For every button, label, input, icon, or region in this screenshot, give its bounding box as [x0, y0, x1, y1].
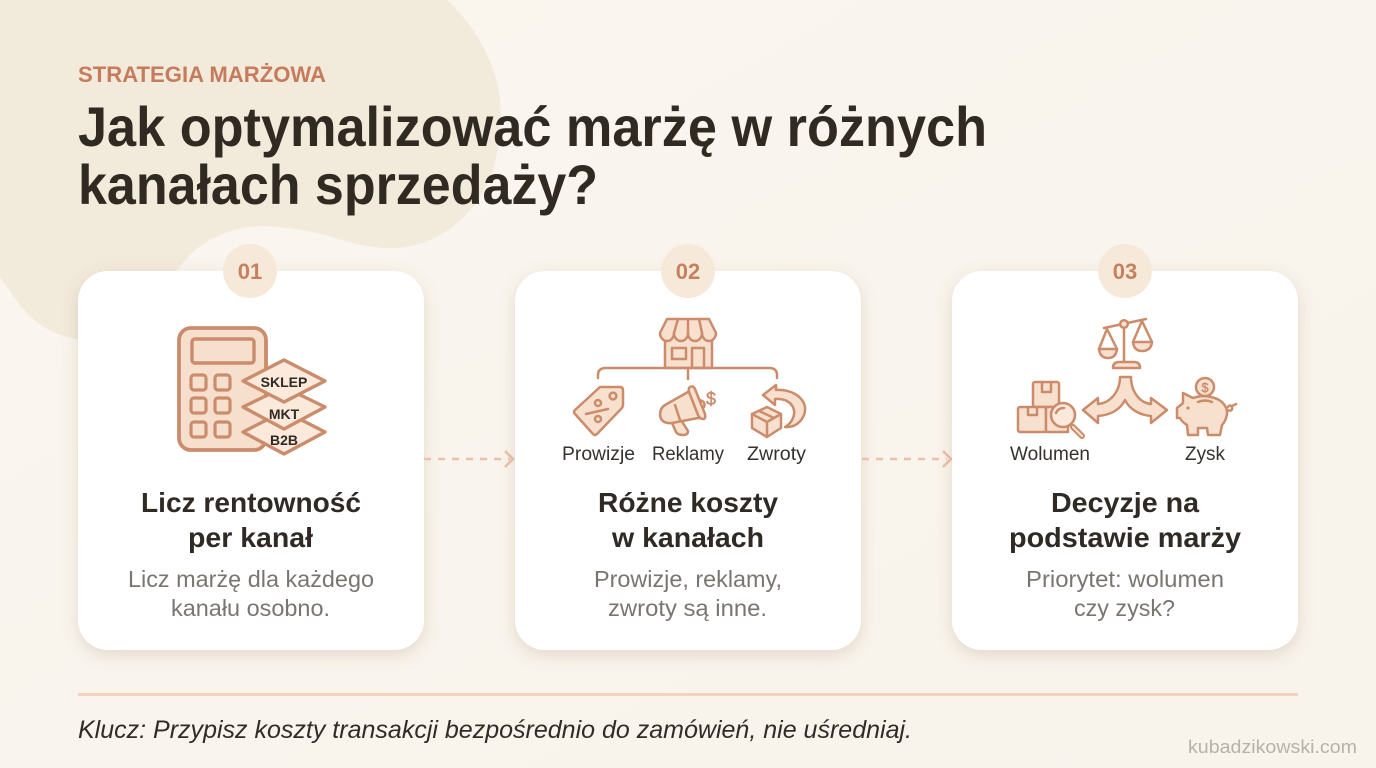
labels — [1010, 444, 1225, 465]
card 02 heading: w kanałach — [611, 522, 764, 553]
card 01 heading — [141, 487, 361, 553]
card 03 text: czy zysk? — [1074, 595, 1175, 621]
labels — [562, 444, 807, 465]
card 03 heading: podstawie marży — [1009, 522, 1241, 553]
card 03 heading — [1009, 487, 1241, 553]
card 02 heading: Różne koszty — [598, 487, 778, 518]
icon: calculator with channel layers: MKT — [269, 406, 300, 422]
card 02 text — [594, 566, 782, 621]
panel: card 01 — [78, 244, 424, 650]
card 01 heading: per kanał — [188, 522, 313, 553]
icon: calculator with channel layers: SKLEP — [261, 374, 307, 390]
footer key message: Klucz: Przypisz koszty transakcji bezpośrednio do zamówień, nie uśredniaj. — [78, 716, 912, 744]
badge 01: 01 — [238, 259, 262, 284]
labels: Reklamy — [652, 444, 724, 465]
panel: card 02 — [515, 244, 861, 650]
card 01 text: kanału osobno. — [171, 595, 330, 621]
panel: card 03 — [952, 244, 1298, 650]
icon: price tag — [574, 387, 623, 435]
icon: decision scale, boxes and piggy bank — [1010, 319, 1236, 465]
icon: split arrow — [1083, 377, 1167, 423]
title: Jak optymalizować marżę w różnych — [78, 95, 987, 158]
labels: Zwroty — [747, 444, 807, 465]
badge 03 — [1098, 244, 1152, 298]
watermark: kubadzikowski.com — [1188, 737, 1357, 757]
icon: piggy bank — [1177, 378, 1236, 435]
arrow: card 02 to 03 — [862, 451, 951, 467]
dollar sign: $ — [1201, 380, 1209, 395]
badge 03: 03 — [1113, 259, 1137, 284]
icon: store branching into costs — [562, 319, 807, 465]
badge 01 — [223, 244, 277, 298]
icon: calculator with channel layers — [179, 328, 325, 454]
labels: Zysk — [1185, 444, 1225, 465]
card 02 text: Prowizje, reklamy, — [594, 566, 782, 592]
badge 02: 02 — [676, 259, 700, 284]
card 03 text — [1026, 566, 1224, 621]
background blob — [0, 0, 501, 340]
card 02 heading — [598, 487, 778, 553]
arrow: card 01 to 02 — [424, 451, 513, 467]
card 02 text: zwroty są inne. — [608, 595, 767, 621]
icon: megaphone — [660, 386, 716, 435]
icon: returned parcel — [752, 385, 805, 437]
labels: Prowizje — [562, 444, 635, 465]
card 01 text: Licz marżę dla każdego — [128, 566, 374, 592]
dollar sign: $ — [706, 389, 716, 409]
title — [78, 95, 987, 216]
icon: store — [660, 319, 716, 368]
card 01 text — [128, 566, 374, 621]
badge 02 — [661, 244, 715, 298]
labels: Wolumen — [1010, 444, 1090, 465]
icon: calculator with channel layers: B2B — [270, 432, 298, 448]
title: kanałach sprzedaży? — [78, 153, 598, 216]
card 03 text: Priorytet: wolumen — [1026, 566, 1224, 592]
icon: scales — [1099, 319, 1152, 368]
icon: boxes with magnifier — [1018, 382, 1082, 436]
card 01 heading: Licz rentowność — [141, 487, 361, 518]
eyebrow label: STRATEGIA MARŻOWA — [78, 62, 326, 87]
card 03 heading: Decyzje na — [1051, 487, 1199, 518]
